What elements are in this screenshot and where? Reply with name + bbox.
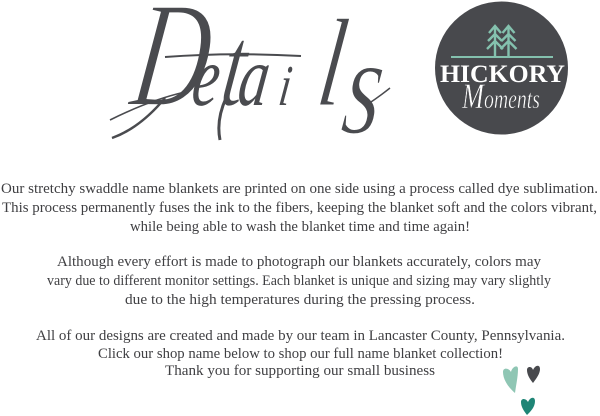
icon: twin pine trees [487,26,516,56]
text block: colour and sizing note: Although every effort is made to photograph our blankets accurately, colors may [57,254,542,270]
text block: printing process: while being able to wash the blanket time and time again! [130,219,470,235]
text block: colour and sizing note: due to the high temperatures during the pressing process. [125,292,475,308]
icon: light teal heart [503,366,518,393]
title: Details: i [275,53,296,118]
text block: printing process: This process permanently fuses the ink to the fibers, keeping the blanket soft and the colors vibrant, [2,200,597,216]
title: Details: t [215,3,257,130]
icon: charcoal heart [527,366,540,383]
text block: closing note: Thank you for supporting our small business [165,363,435,379]
text block: colour and sizing note: vary due to different monitor settings. Each blanket is unique and sizing may vary slightly [47,273,552,289]
text block: printing process [1,181,598,235]
logo wordmark: Hickory: HICKORY [440,61,565,88]
icon: teal heart [521,398,535,415]
logo: Hickory Moments badge [435,2,568,134]
text block: printing process: Our stretchy swaddle name blankets are printed on one side using a process called dye sublimation. [1,181,598,197]
text block: closing note: Click our shop name below to shop our full name blanket collection! [98,346,503,362]
title: Details: s [335,10,395,164]
text block: colour and sizing note [47,254,552,308]
logo script: Moments: Moments [461,76,540,116]
title: Details: e [187,29,227,123]
title: Details [110,0,400,164]
text block: closing note [36,328,565,379]
text block: closing note: All of our designs are created and made by our team in Lancaster County, Pennsylvania. [36,328,565,344]
logo rule [451,56,553,58]
title: Details: a [233,29,276,123]
